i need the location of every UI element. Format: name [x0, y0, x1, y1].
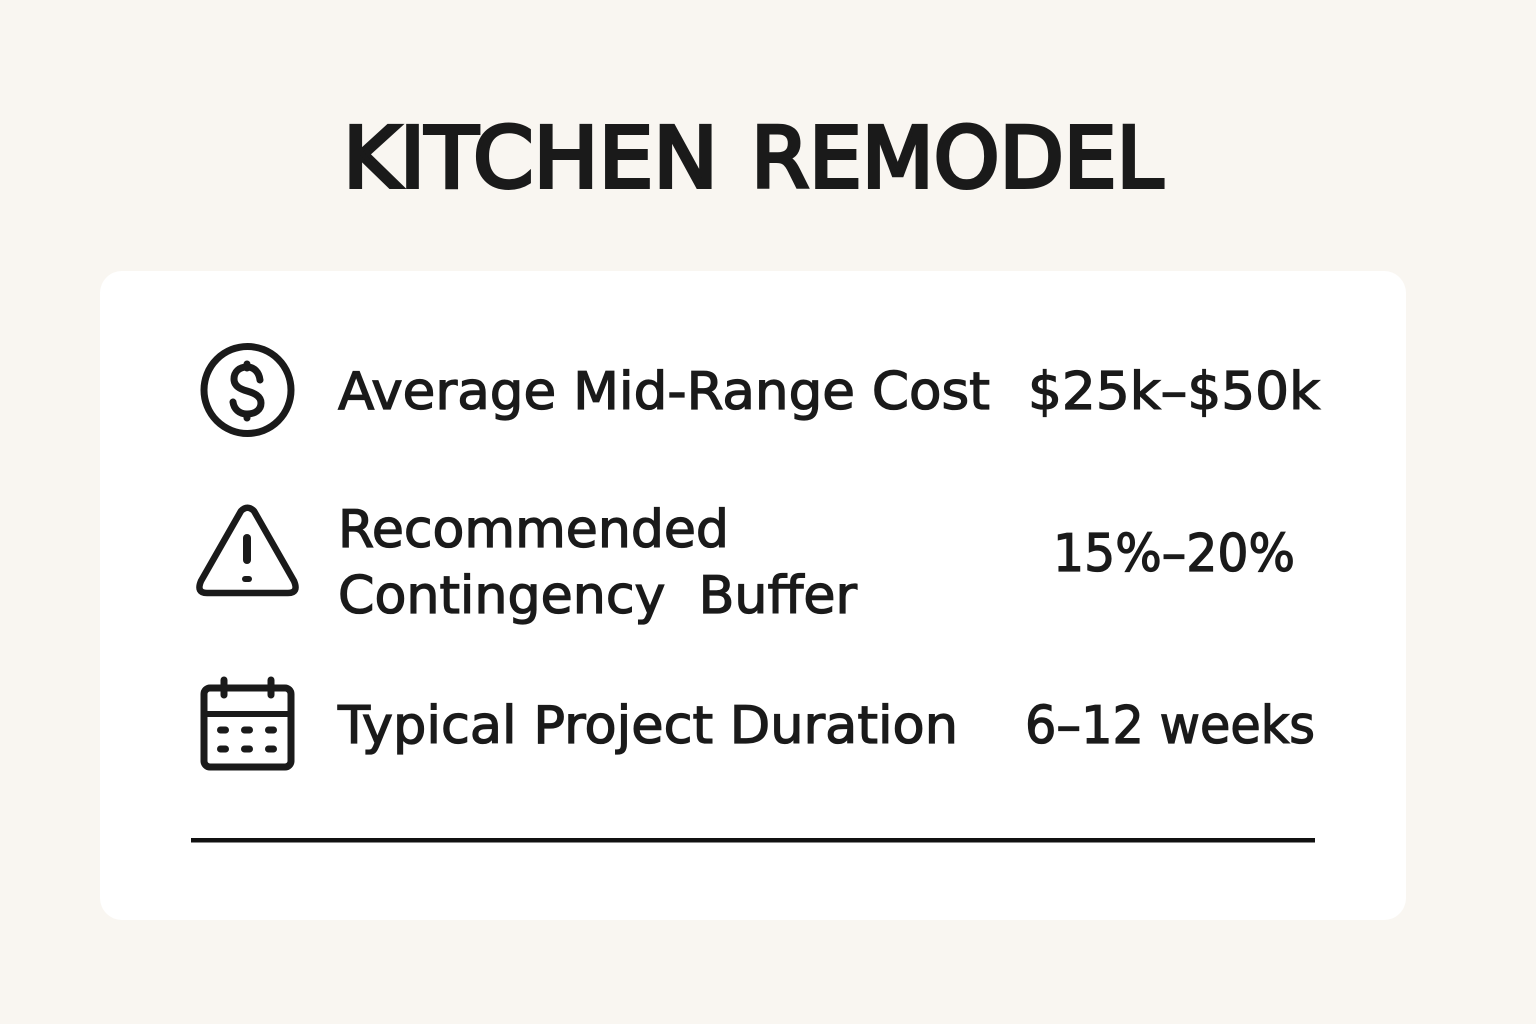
label: contingency buffer: Recommended: [338, 500, 729, 560]
title: [343, 109, 1163, 207]
icon: calendar: [204, 680, 291, 767]
label: project duration: Typical Project Duration: [337, 696, 958, 756]
value: project duration: 6–12 weeks: [1025, 696, 1315, 756]
divider line: [191, 838, 1315, 842]
panel: stats card: [100, 271, 1406, 920]
title: REMODEL: [751, 109, 1163, 207]
value: average cost: $25k–$50k: [1028, 362, 1320, 422]
title: KITCHEN: [343, 109, 718, 207]
label: average cost: Average Mid-Range Cost: [338, 362, 990, 422]
value: contingency buffer: 15%–20%: [1053, 524, 1295, 584]
icon: dollar coin: [204, 346, 291, 434]
icon: warning triangle: [199, 508, 296, 593]
label: contingency buffer: Contingency Buffer: [338, 566, 858, 626]
label: contingency buffer: [338, 500, 858, 626]
